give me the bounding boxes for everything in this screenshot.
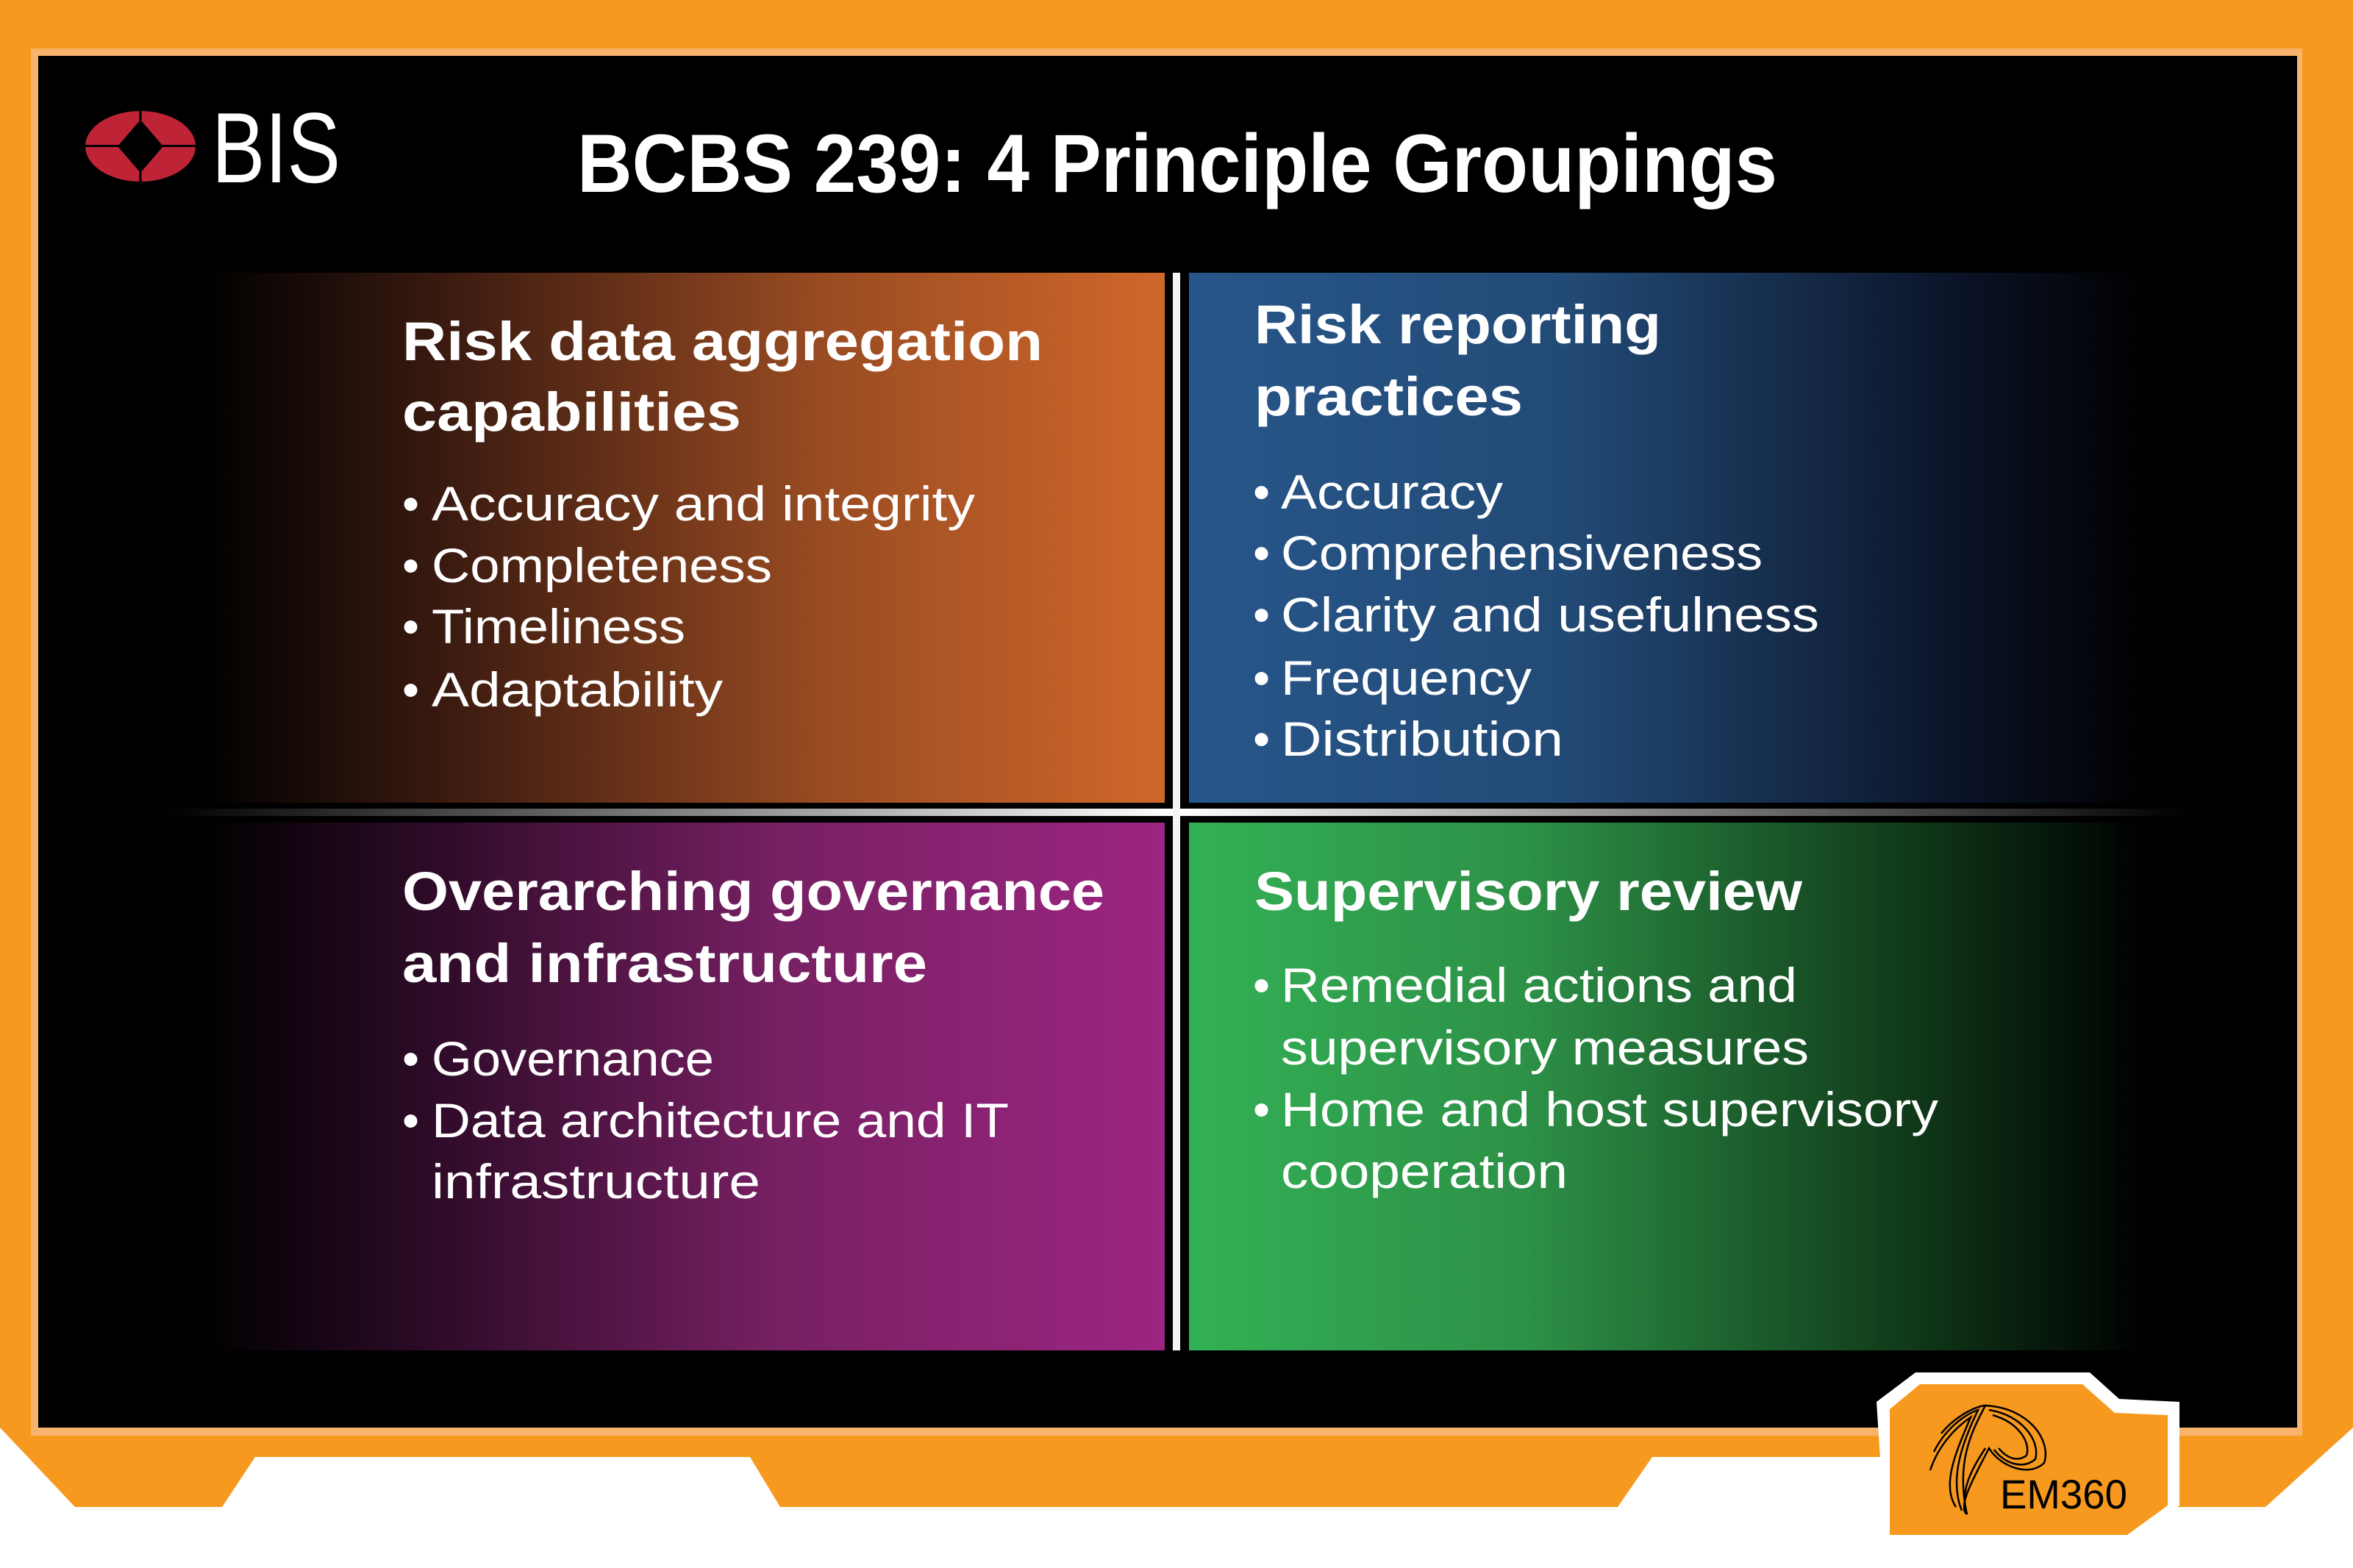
panel: risk data aggregation: Adaptability xyxy=(432,662,723,717)
panel: supervisory review: Home and host supervisory xyxy=(1281,1082,1938,1136)
logo: EM360 badge: EM360 xyxy=(2000,1471,2127,1517)
panel: risk data aggregation: capabilities xyxy=(402,382,741,443)
panel: risk data aggregation: Risk data aggregation xyxy=(402,311,1043,372)
panel: supervisory review xyxy=(1189,823,2146,1350)
panel: supervisory review: Remedial actions and xyxy=(1281,958,1797,1012)
title: BCBS 239: 4 Principle Groupings xyxy=(577,118,1777,210)
logo: EM360 badge xyxy=(1877,1372,2179,1538)
panel: governance: and infrastructure xyxy=(402,933,927,994)
panel: risk reporting: Accuracy xyxy=(1281,465,1503,519)
panel: risk reporting: Clarity and usefulness xyxy=(1281,587,1819,642)
panel: governance: Data architecture and IT xyxy=(432,1093,1009,1148)
panel: risk data aggregation: • xyxy=(402,599,419,654)
panel: risk reporting: • xyxy=(1253,465,1270,519)
logo: BIS: BIS xyxy=(212,92,340,204)
panel: risk reporting: • xyxy=(1253,712,1270,766)
panel: risk data aggregation: • xyxy=(402,662,419,717)
panel: risk data aggregation: • xyxy=(402,476,419,531)
panel: risk reporting: Frequency xyxy=(1281,651,1532,705)
panel: risk reporting: Distribution xyxy=(1281,712,1563,766)
panel: risk data aggregation: Accuracy and integrity xyxy=(432,476,975,531)
panel: governance: • xyxy=(402,1031,419,1086)
panel: risk reporting: practices xyxy=(1254,366,1523,427)
panel: risk reporting: Comprehensiveness xyxy=(1281,526,1763,580)
panel: risk reporting: • xyxy=(1253,526,1270,580)
panel: governance: Overarching governance xyxy=(402,861,1104,922)
panel: supervisory review: Supervisory review xyxy=(1254,861,1802,922)
panel: risk reporting xyxy=(1189,273,2146,803)
panel: supervisory review: • xyxy=(1253,958,1270,1012)
panel: risk data aggregation xyxy=(203,273,1165,803)
panel: risk reporting: Risk reporting xyxy=(1254,294,1661,355)
panel: governance: Governance xyxy=(432,1031,714,1086)
panel: risk data aggregation: Completeness xyxy=(432,538,772,593)
panel: risk data aggregation: • xyxy=(402,538,419,593)
panel: supervisory review: cooperation xyxy=(1281,1144,1568,1198)
panel: risk reporting: • xyxy=(1253,587,1270,642)
panel: governance: infrastructure xyxy=(432,1154,760,1209)
panel: risk reporting: • xyxy=(1253,651,1270,705)
logo: BIS xyxy=(85,92,340,204)
panel: supervisory review: • xyxy=(1253,1082,1270,1136)
panel: risk data aggregation: Timeliness xyxy=(432,599,685,654)
panel: governance xyxy=(203,823,1165,1350)
panel: governance: • xyxy=(402,1093,419,1148)
panel: supervisory review: supervisory measures xyxy=(1281,1020,1809,1075)
